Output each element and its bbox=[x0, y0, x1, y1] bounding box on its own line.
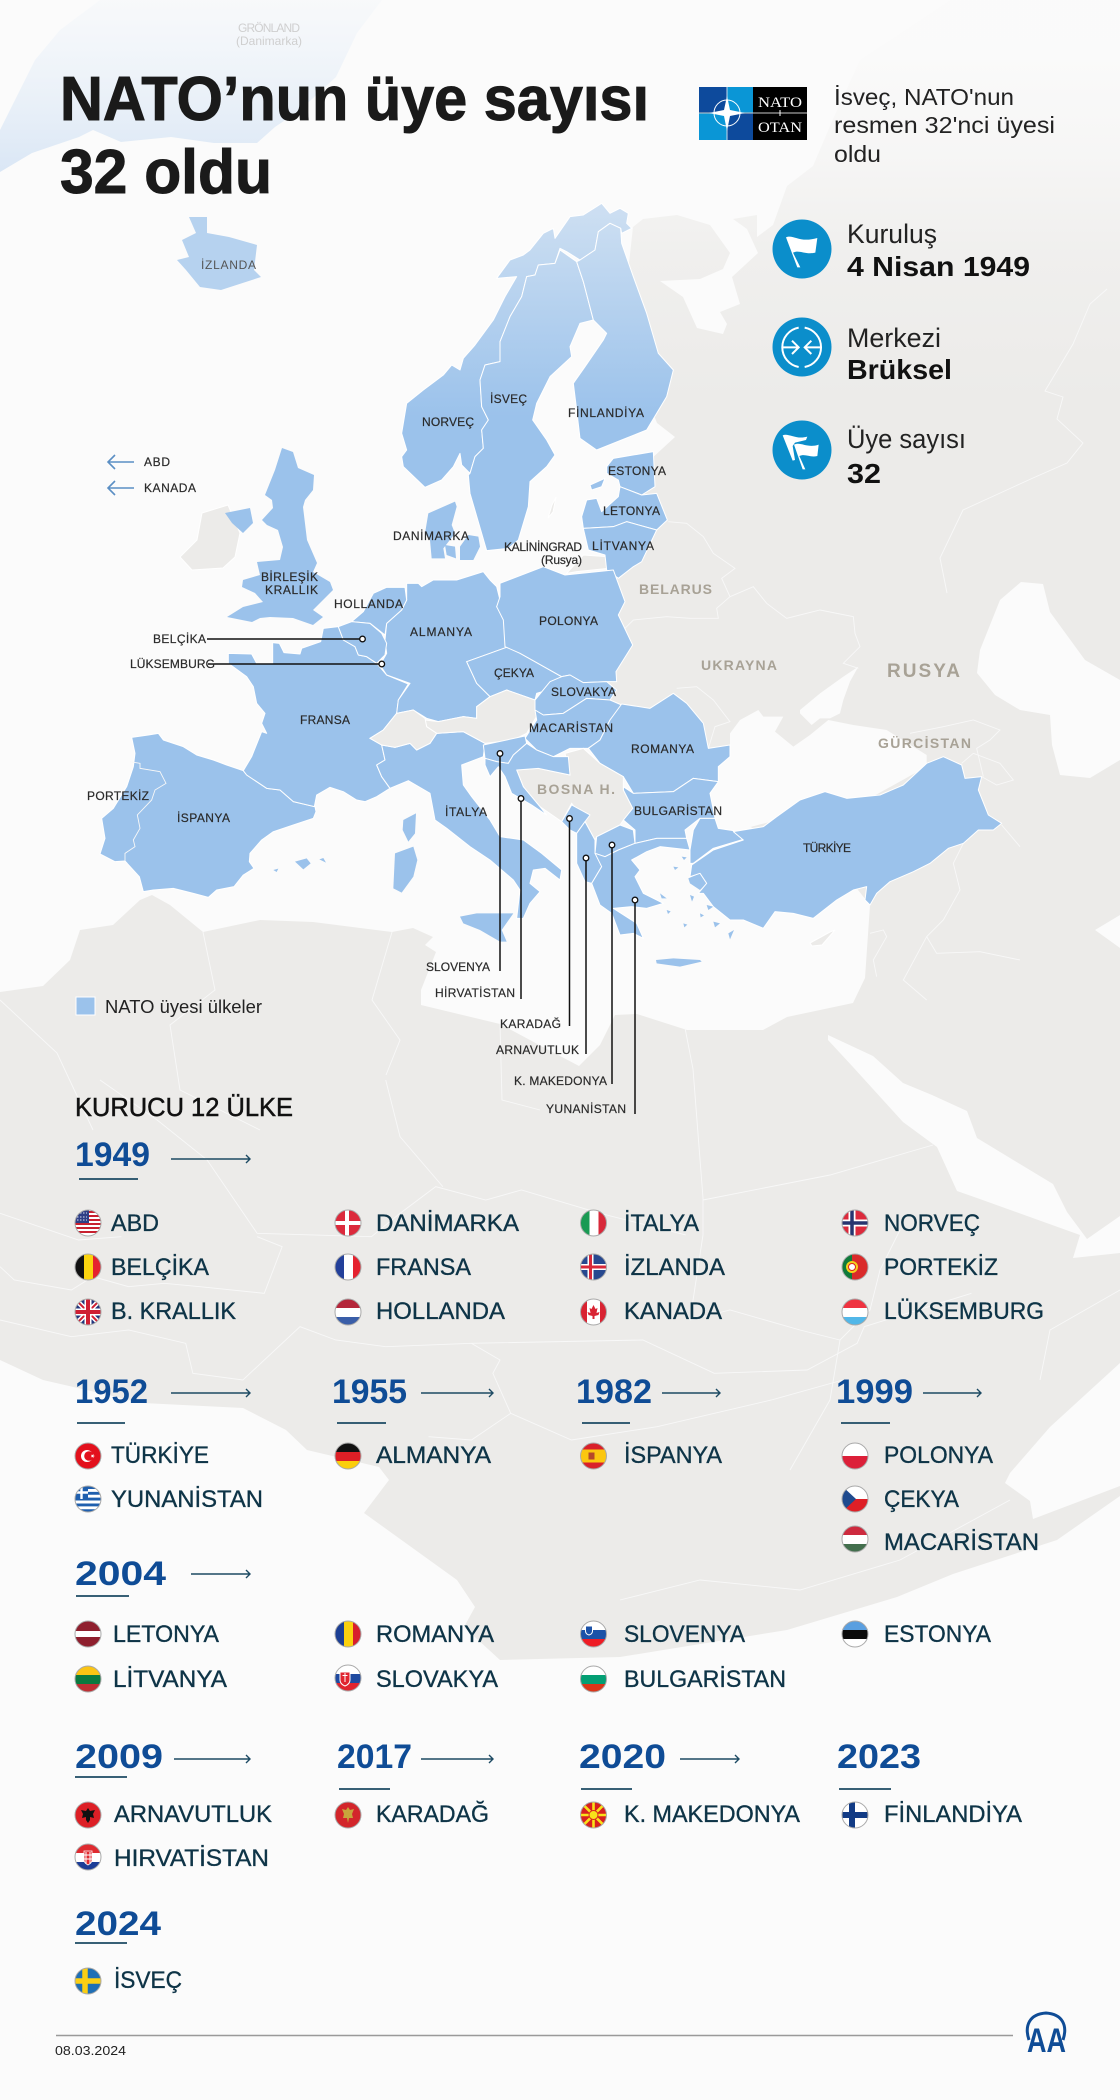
line: Belçika bbox=[207, 636, 365, 642]
country: Slovakya: SLOVAKYA bbox=[376, 1666, 499, 1693]
country: Yunanistan: YUNANİSTAN bbox=[111, 1486, 263, 1513]
year: 1999: 1999 bbox=[836, 1373, 913, 1411]
label: Fransa: FRANSA bbox=[300, 713, 350, 727]
Black Sea bbox=[710, 710, 927, 832]
map: background land bbox=[0, 0, 1120, 1660]
label: Gürcistan: GÜRCİSTAN bbox=[878, 735, 971, 751]
NATO logo: OTAN bbox=[758, 120, 802, 136]
Italy bbox=[377, 732, 562, 918]
label: Macaristan: MACARİSTAN bbox=[529, 721, 613, 735]
Sea of Azov bbox=[800, 667, 858, 725]
Austria bbox=[425, 690, 538, 743]
line: Slovenya bbox=[497, 751, 503, 971]
country: İzlanda bbox=[580, 1254, 726, 1281]
label: Lüksemburg: LÜKSEMBURG bbox=[130, 657, 215, 671]
Montenegro bbox=[562, 805, 590, 833]
country: Letonya: LETONYA bbox=[113, 1621, 220, 1648]
Romania bbox=[588, 693, 730, 793]
label: Belçika: BELÇİKA bbox=[153, 632, 206, 646]
North Macedonia bbox=[595, 825, 635, 857]
icon: two flags bbox=[772, 420, 832, 480]
line: Yunanistan bbox=[632, 897, 638, 1114]
Estonia bbox=[590, 452, 655, 495]
country: Norveç: NORVEÇ bbox=[884, 1210, 980, 1237]
Finland bbox=[573, 223, 673, 450]
country: Çekya: ÇEKYA bbox=[884, 1486, 960, 1513]
Spain bbox=[100, 733, 316, 897]
Czechia bbox=[467, 647, 562, 700]
year: 1949 bbox=[75, 1136, 250, 1179]
year: 2009: 2009 bbox=[75, 1738, 163, 1776]
stat: Üye sayısı: Üye sayısı bbox=[847, 424, 966, 454]
label: İzlanda: İZLANDA bbox=[201, 258, 256, 272]
arrow: ABD: ABD bbox=[144, 455, 170, 469]
Croatia bbox=[485, 743, 570, 815]
label: Grönland: GRÖNLAND bbox=[238, 21, 300, 35]
year: 2020 bbox=[579, 1738, 739, 1789]
line: Lüksemburg bbox=[208, 661, 385, 667]
label: Ukrayna: UKRAYNA bbox=[701, 657, 777, 673]
Eurasia and Africa land bbox=[0, 0, 1120, 1660]
icon: headquarters arrows bbox=[772, 318, 832, 376]
label: İspanya: İSPANYA bbox=[177, 811, 230, 825]
label: Bulgaristan: BULGARİSTAN bbox=[634, 804, 722, 818]
Ireland bbox=[180, 505, 240, 570]
intro text: resmen 32'nci üyesi bbox=[834, 112, 1055, 138]
country: Finlandiya: FİNLANDİYA bbox=[884, 1801, 1023, 1828]
year: 2004: 2004 bbox=[75, 1555, 166, 1593]
Gotland bbox=[548, 497, 556, 518]
NATO logo: NATO bbox=[758, 95, 802, 111]
Kaliningrad bbox=[567, 555, 608, 573]
year: 1955 bbox=[332, 1373, 493, 1423]
map: leader lines bbox=[207, 636, 638, 1114]
year: 2017: 2017 bbox=[337, 1738, 412, 1776]
country: Slovenya bbox=[580, 1621, 746, 1648]
country: İspanya bbox=[580, 1442, 723, 1469]
country: Macaristan: MACARİSTAN bbox=[884, 1529, 1039, 1556]
title bbox=[60, 65, 649, 207]
label: Grönland bbox=[236, 21, 302, 48]
label: Polonya: POLONYA bbox=[539, 614, 598, 628]
year: 2017 bbox=[337, 1738, 493, 1789]
country: Danimarka: DANİMARKA bbox=[376, 1210, 520, 1237]
country: Litvanya: LİTVANYA bbox=[113, 1666, 228, 1693]
label: Grönland: (Danimarka) bbox=[236, 34, 302, 48]
label: Rusya: RUSYA bbox=[887, 661, 960, 682]
label: Arnavutluk: ARNAVUTLUK bbox=[496, 1043, 579, 1057]
Norway bbox=[402, 203, 632, 487]
year: 1955: 1955 bbox=[332, 1373, 407, 1411]
Nordic and Baltic countries bbox=[402, 203, 673, 578]
label: K. Makedonya: K. MAKEDONYA bbox=[514, 1074, 607, 1088]
country: Norveç bbox=[842, 1210, 980, 1237]
Slovenia bbox=[483, 736, 527, 763]
stat: Merkezi bbox=[772, 318, 952, 385]
stat: Üye sayısı bbox=[772, 420, 966, 489]
stat: Kuruluş: Kuruluş bbox=[847, 219, 937, 249]
country: Hırvatistan: HIRVATİSTAN bbox=[114, 1845, 269, 1872]
year: 2020: 2020 bbox=[579, 1738, 666, 1776]
Netherlands bbox=[352, 587, 407, 635]
label: Letonya: LETONYA bbox=[603, 504, 660, 518]
AA logo: AA bbox=[1027, 2022, 1066, 2060]
country: Karadağ: KARADAĞ bbox=[376, 1801, 489, 1828]
Aegean islands bbox=[660, 857, 734, 939]
African borders bbox=[0, 1080, 971, 1440]
Sicily bbox=[460, 913, 513, 942]
country: Slovenya: SLOVENYA bbox=[624, 1621, 746, 1648]
Turkey: Anatolia bbox=[690, 757, 1002, 928]
country: İsveç bbox=[75, 1967, 182, 1994]
year: 1982: 1982 bbox=[576, 1373, 652, 1411]
eastern European borders bbox=[625, 522, 1020, 1000]
Crete bbox=[656, 958, 702, 967]
country: İtalya bbox=[580, 1210, 700, 1237]
United Kingdom bbox=[225, 448, 333, 625]
Denmark bbox=[425, 502, 480, 560]
label: Kaliningrad bbox=[504, 540, 582, 567]
country: Portekiz bbox=[842, 1254, 998, 1281]
Hungary bbox=[525, 698, 622, 757]
Switzerland bbox=[370, 710, 437, 750]
sea overlays bbox=[567, 555, 927, 832]
label: Hollanda: HOLLANDA bbox=[334, 597, 403, 611]
line: Hırvatistan bbox=[518, 796, 524, 999]
Portugal border bbox=[125, 762, 166, 861]
line: Karadağ bbox=[567, 816, 572, 1026]
label: Romanya: ROMANYA bbox=[631, 742, 694, 756]
NATO logo bbox=[699, 87, 807, 140]
year: 1952: 1952 bbox=[75, 1373, 148, 1411]
country: Polonya: POLONYA bbox=[884, 1442, 994, 1469]
country: K. Makedonya: K. MAKEDONYA bbox=[624, 1801, 801, 1828]
label: Hırvatistan: HİRVATİSTAN bbox=[435, 986, 515, 1000]
country: Fransa: FRANSA bbox=[376, 1254, 472, 1281]
country: Almanya: ALMANYA bbox=[376, 1442, 492, 1469]
Germany bbox=[380, 572, 508, 722]
Serbia, Bosnia and Kosovo bbox=[517, 748, 633, 840]
arrow: Kanada: KANADA bbox=[144, 481, 196, 495]
icon: flag bbox=[772, 220, 832, 278]
Cyprus bbox=[810, 930, 835, 946]
label: Danimarka: DANİMARKA bbox=[393, 529, 469, 543]
Corsica bbox=[403, 813, 416, 842]
Balearic Islands bbox=[273, 858, 326, 872]
Sardinia bbox=[393, 847, 417, 893]
label: Belarus: BELARUS bbox=[639, 581, 712, 597]
label: Birleşik Krallık: KRALLIK bbox=[265, 583, 318, 597]
Poland bbox=[497, 567, 633, 683]
country: Türkiye bbox=[75, 1442, 209, 1469]
North Russia border bbox=[940, 289, 1107, 593]
label: Karadağ: KARADAĞ bbox=[500, 1016, 561, 1031]
country: Kanada: KANADA bbox=[624, 1298, 723, 1325]
Latvia bbox=[582, 487, 667, 530]
footer rule bbox=[56, 2034, 1013, 2036]
country: ABD bbox=[75, 1210, 159, 1237]
country: Romanya: ROMANYA bbox=[376, 1621, 495, 1648]
line: K. Makedonya bbox=[609, 842, 615, 1084]
map: land borders bbox=[0, 289, 1120, 1600]
country: İsveç: İSVEÇ bbox=[114, 1967, 182, 1994]
stat: Kuruluş: 4 Nisan 1949 bbox=[847, 251, 1030, 282]
label: Birleşik Krallık bbox=[261, 570, 318, 597]
France bbox=[228, 627, 408, 807]
Bulgaria bbox=[623, 778, 718, 843]
map: country labels bbox=[87, 21, 971, 1116]
stat: Üye sayısı: 32 bbox=[847, 458, 881, 489]
country: Estonya: ESTONYA bbox=[884, 1621, 992, 1648]
heading: founders: KURUCU 12 ÜLKE bbox=[75, 1092, 293, 1122]
label: Portekiz: PORTEKİZ bbox=[87, 789, 149, 803]
Albania bbox=[577, 822, 605, 883]
label: Estonya: ESTONYA bbox=[608, 464, 666, 478]
country: Kanada bbox=[580, 1298, 723, 1325]
label: Norveç: NORVEÇ bbox=[422, 415, 474, 429]
North African borders bbox=[0, 932, 540, 1130]
country: Hollanda: HOLLANDA bbox=[376, 1298, 506, 1325]
legend: NATO üyesi ülkeler bbox=[105, 997, 262, 1017]
country: İspanya: İSPANYA bbox=[624, 1442, 723, 1469]
Sweden bbox=[468, 250, 593, 551]
stat: Kuruluş bbox=[772, 219, 1030, 282]
country: İtalya: İTALYA bbox=[624, 1210, 700, 1237]
Eastern Europe and Balkans bbox=[483, 567, 1002, 967]
country: İzlanda: İZLANDA bbox=[624, 1254, 726, 1281]
Caspian Sea bbox=[977, 582, 1120, 778]
country: Portekiz: PORTEKİZ bbox=[884, 1254, 998, 1281]
year: 2023 bbox=[837, 1738, 921, 1789]
country: Fransa bbox=[335, 1254, 472, 1281]
label: Litvanya: LİTVANYA bbox=[592, 539, 654, 553]
Lithuania bbox=[583, 522, 657, 578]
Persian Gulf bbox=[1095, 915, 1120, 948]
country: Türkiye: TÜRKİYE bbox=[111, 1442, 209, 1469]
line: Arnavutluk bbox=[583, 855, 589, 1054]
country: Polonya bbox=[842, 1442, 994, 1469]
title: NATO’nun üye sayısı bbox=[60, 65, 649, 134]
stat: Merkezi: Merkezi bbox=[847, 323, 941, 353]
year: 2023: 2023 bbox=[837, 1738, 921, 1776]
label: Türkiye: TÜRKİYE bbox=[803, 841, 851, 855]
year: 1952 bbox=[75, 1373, 250, 1423]
country: ABD: ABD bbox=[111, 1210, 159, 1237]
year: 1999 bbox=[836, 1373, 981, 1423]
AA logo bbox=[1027, 2013, 1066, 2060]
label: Bosna H.: BOSNA H. bbox=[537, 781, 615, 797]
label: İsveç: İSVEÇ bbox=[490, 392, 527, 406]
date: 08.03.2024 bbox=[55, 2043, 126, 2058]
country: Estonya bbox=[842, 1621, 992, 1648]
country: Lüksemburg: LÜKSEMBURG bbox=[884, 1298, 1044, 1325]
country: Arnavutluk: ARNAVUTLUK bbox=[114, 1801, 273, 1828]
intro text bbox=[834, 84, 1055, 167]
arrows: ABD and Kanada bbox=[108, 455, 196, 495]
intro text: İsveç, NATO'nun bbox=[834, 84, 1014, 110]
country: B. Krallık: B. KRALLIK bbox=[111, 1298, 237, 1325]
year: 1949: 1949 bbox=[75, 1136, 150, 1174]
map: NATO member countries bbox=[100, 203, 1002, 967]
label: Kaliningrad: KALİNİNGRAD bbox=[504, 540, 582, 554]
Turkey: Thrace bbox=[690, 818, 743, 863]
country: Bulgaristan: BULGARİSTAN bbox=[624, 1666, 786, 1693]
label: İtalya: İTALYA bbox=[445, 805, 487, 819]
label: Yunanistan: YUNANİSTAN bbox=[546, 1102, 626, 1116]
label: Almanya: ALMANYA bbox=[410, 625, 472, 639]
country: Belçika: BELÇİKA bbox=[111, 1254, 210, 1281]
year: 1982 bbox=[576, 1373, 720, 1423]
Belgium and Luxembourg bbox=[338, 622, 387, 663]
intro text: oldu bbox=[834, 141, 881, 167]
label: Kaliningrad: (Rusya) bbox=[541, 553, 582, 567]
Red Sea and Gulf of Aden bbox=[828, 1035, 1120, 1258]
Great Britain bbox=[227, 448, 333, 625]
Western and Central Europe bbox=[100, 572, 562, 942]
year: 2009 bbox=[75, 1738, 250, 1777]
Greece bbox=[592, 838, 690, 938]
label: Birleşik Krallık: BİRLEŞİK bbox=[261, 570, 318, 584]
stat: Merkezi: Brüksel bbox=[847, 354, 952, 385]
year: 2004 bbox=[75, 1555, 250, 1596]
Greenland bbox=[0, 0, 382, 172]
year: 2024: 2024 bbox=[75, 1905, 161, 1943]
country: Çekya bbox=[842, 1486, 960, 1513]
label: Finlandiya: FİNLANDİYA bbox=[568, 406, 644, 420]
Egypt, Libya and Sudan borders bbox=[685, 1028, 933, 1320]
label: Çekya: ÇEKYA bbox=[494, 666, 534, 680]
label: Slovenya: SLOVENYA bbox=[426, 960, 490, 974]
title: 32 oldu bbox=[60, 138, 272, 207]
label: Slovakya: SLOVAKYA bbox=[551, 685, 616, 699]
country: Macaristan bbox=[842, 1526, 1038, 1552]
Iceland bbox=[177, 217, 261, 290]
Slovakia bbox=[535, 675, 617, 715]
Northern Ireland bbox=[225, 508, 253, 533]
